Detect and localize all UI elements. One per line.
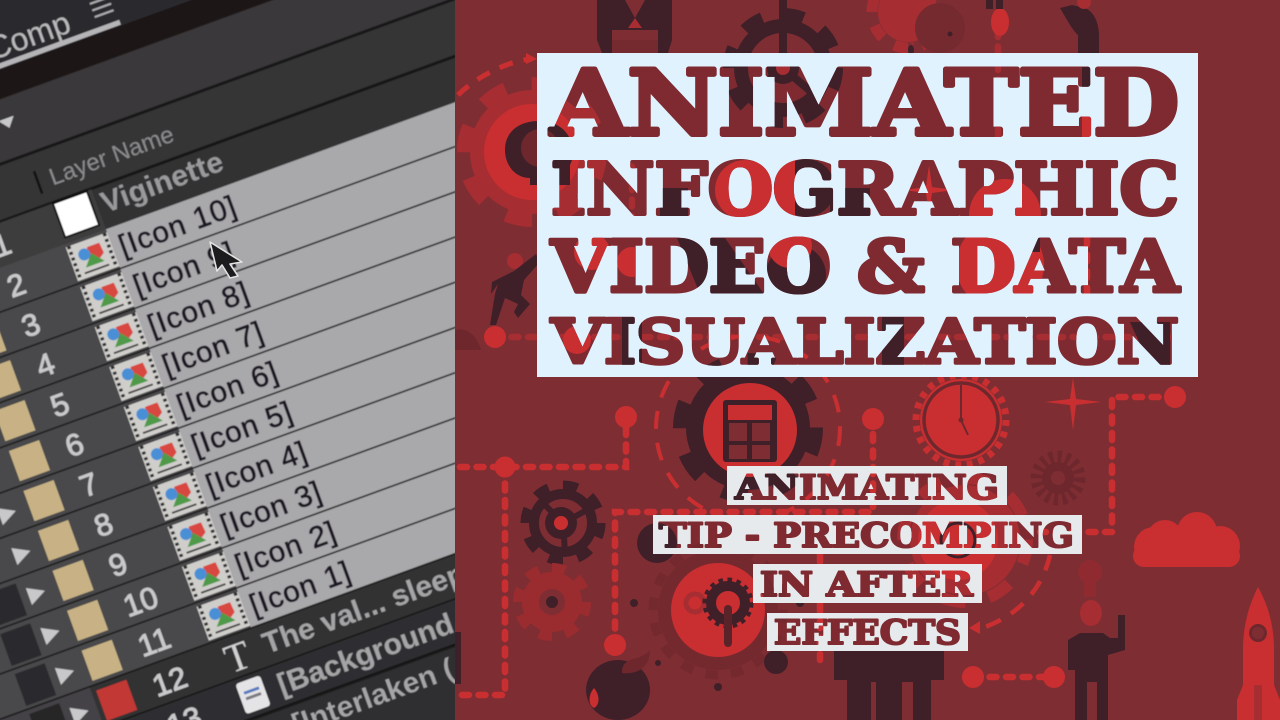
- layer row 10: Icon 2: [0, 463, 455, 675]
- layer row 11: Icon 1: 11: [133, 620, 175, 664]
- layer row 4: Icon 8: [Icon 8]: [143, 276, 254, 343]
- icon: head gear, left: [464, 84, 600, 220]
- subtitle labels: TIP - PRECOMPING: [659, 516, 1074, 556]
- icon: spiky sun: [1037, 457, 1079, 499]
- layer row 1: Viginette: Viginette: [97, 145, 228, 220]
- icon: dark gear: [525, 485, 601, 561]
- subtitle labels: EFFECTS: [774, 613, 961, 653]
- dashed arc with arrow, top left: [458, 53, 537, 95]
- title panel: [537, 53, 1198, 377]
- background illustration: [455, 0, 1280, 720]
- icon: man, top left: [597, 0, 672, 53]
- icon: dome: [455, 329, 481, 350]
- layer row 12: text layer: 12: [148, 659, 192, 704]
- dashed ring around calculator gear: [656, 336, 840, 520]
- icon: center red gear: [903, 478, 1027, 602]
- icon: mid gear: [518, 568, 586, 636]
- layer row 9: Icon 3: [Icon 3]: [216, 475, 327, 542]
- icon: top right man: [986, 0, 1099, 53]
- layer row 5: Icon 7: [Icon 7]: [158, 315, 268, 383]
- layer row 11: Icon 1: [0, 508, 455, 720]
- title: INFOGRAPHIC: [551, 147, 1179, 231]
- icon: mouse cursor: [210, 242, 242, 278]
- dashed connector lines: [460, 30, 1180, 695]
- title: [550, 50, 1180, 378]
- layer row 7: Icon 5: [Icon 5]: [187, 395, 298, 462]
- layer row 13: background image: [124, 600, 455, 720]
- layer row 4: Icon 8: [0, 192, 455, 404]
- small dark dots: [630, 523, 804, 691]
- icon: wrench gear: [653, 545, 783, 675]
- layer row 9: Icon 3: [0, 418, 455, 630]
- layer row 6: Icon 6: [Icon 6]: [172, 355, 283, 423]
- layer row 2: Icon 10: 2: [2, 266, 30, 304]
- layer row 7: Icon 5: 7: [75, 465, 103, 504]
- layer row 7: Icon 5: [0, 328, 455, 539]
- layer row 4: Icon 8: 4: [31, 346, 59, 384]
- layer row 10: Icon 2: [Icon 2]: [231, 515, 341, 582]
- subtitle labels: ANIMATING: [734, 468, 999, 508]
- layer row 13: background image: [Background.: [273, 604, 466, 702]
- icon: runner: [490, 253, 540, 325]
- icon: dropdown triangle: [0, 115, 14, 128]
- layer row 1: Viginette: [0, 156, 224, 267]
- icon: top mid gear: [872, 0, 965, 55]
- icon: star: [1045, 378, 1101, 430]
- connector dots: [484, 8, 1186, 688]
- icon: apple: [586, 650, 650, 720]
- column header: Layer Name: Layer Name: [46, 121, 178, 191]
- layer row 6: Icon 6: [0, 282, 455, 494]
- layer row 2: Icon 10: [0, 101, 455, 313]
- icon: calculator gear: [680, 360, 816, 496]
- layer row 3: Icon 9: [Icon 9]: [129, 236, 239, 303]
- icon: left edge figure: [455, 632, 461, 684]
- layer row 8: Icon 4: 8: [89, 505, 118, 544]
- layer row 8: Icon 4: [Icon 4]: [202, 435, 312, 502]
- panel: After Effects layer list screenshot: [0, 0, 455, 720]
- icon: clock: [916, 375, 1006, 465]
- title: VISUALIZATION: [550, 307, 1179, 378]
- icon: tab menu: [90, 0, 114, 17]
- tab underline: [0, 19, 122, 70]
- panel: red infographic background: [455, 0, 1280, 720]
- layer row 12: text layer: The val... sleep: [258, 557, 470, 661]
- dashed arc with arrow, lower right: [969, 555, 1050, 634]
- icon: cloud: [1133, 512, 1240, 567]
- background art showing through the letters: [547, 66, 1172, 645]
- icon: presenter: [1068, 600, 1125, 720]
- icon: rocket: [1237, 587, 1280, 720]
- layer row 3: Icon 9: [0, 146, 455, 358]
- title: ANIMATED: [550, 50, 1179, 156]
- layer row 8: Icon 4: [0, 372, 455, 584]
- layer row 10: Icon 2: 10: [118, 579, 163, 624]
- layer row 12: text layer: T: [218, 632, 257, 682]
- layer row 11: Icon 1: [Icon 1]: [245, 555, 356, 622]
- title: VIDEO & DATA: [550, 224, 1180, 308]
- subtitle labels: [653, 466, 1082, 653]
- layer row 6: Icon 6: 6: [60, 425, 88, 464]
- layer row 3: Icon 9: 3: [17, 306, 45, 344]
- layer row 2: Icon 10: [Icon 10]: [114, 190, 241, 263]
- icon: top gear: [729, 0, 837, 122]
- layer row 5: Icon 7: 5: [46, 385, 74, 424]
- icon: light bulb: [1078, 560, 1102, 597]
- layer row 12: text layer: [0, 554, 455, 720]
- layer row 9: Icon 3: 9: [104, 545, 132, 584]
- hidden art behind title letters: [563, 67, 1170, 367]
- layer row 5: Icon 7: [0, 237, 455, 448]
- subtitle labels: IN AFTER: [760, 565, 974, 605]
- icon: men in suits: [834, 651, 944, 720]
